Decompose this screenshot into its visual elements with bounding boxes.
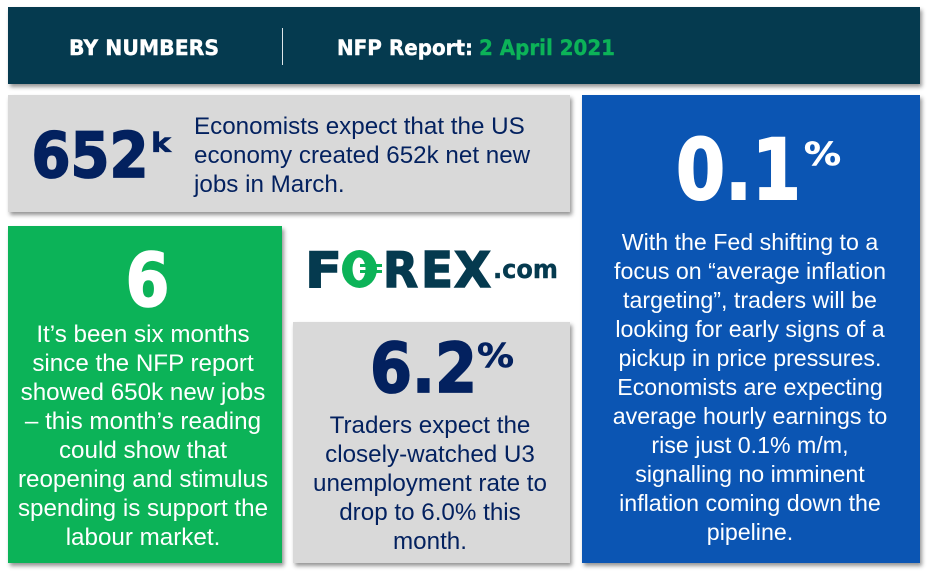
text: traders expect [313, 412, 547, 555]
text: inflation targeting: pickup in price pressures. [619, 345, 881, 371]
text: economists expect [193, 113, 530, 198]
text: inflation targeting: pipeline. [707, 519, 793, 545]
header title: NFP report date [337, 36, 615, 60]
text: six months since: since the NFP report [32, 350, 254, 377]
header bar [8, 7, 920, 84]
logo: FOREX.com: R [383, 242, 418, 299]
text: six months since: reopening and stimulus [18, 466, 268, 493]
icon: green O with currency mark [342, 250, 382, 288]
text: six months since: spending is support the [18, 495, 268, 522]
panel: 652k jobs [8, 95, 570, 212]
stat: 652k: k [151, 128, 172, 159]
text: inflation targeting: targeting”, traders will be [623, 287, 877, 313]
header title: NFP report date: NFP Report: [337, 36, 473, 60]
panel: 6.2% unemployment [293, 322, 570, 563]
text: traders expect: Traders expect the [330, 412, 530, 439]
text: inflation targeting: inflation coming down the [619, 490, 881, 516]
text: inflation targeting: focus on “average inflation [614, 258, 886, 284]
text: inflation targeting: signalling no imminent [635, 461, 865, 487]
stat: 652k: 652 [32, 119, 148, 192]
panel: 6 months [8, 226, 282, 563]
text: traders expect: drop to 6.0% this [339, 499, 521, 526]
header label: by numbers: BY NUMBERS [69, 36, 219, 60]
text: six months since: showed 650k new jobs [21, 379, 265, 406]
logo: FOREX.com: X [454, 242, 491, 299]
text: traders expect: unemployment rate to [313, 470, 547, 497]
text: inflation targeting: With the Fed shifting to a [622, 229, 878, 255]
stat: 6: 6 [126, 238, 170, 324]
logo: FOREX.com: .com [493, 255, 558, 285]
stat: 6.2%: % [477, 336, 514, 375]
text: traders expect: month. [393, 528, 467, 555]
text: economists expect: economy created 652k net new [194, 142, 530, 169]
text: economists expect: jobs in March. [194, 171, 345, 198]
text: inflation targeting: Economists are expecting [617, 374, 883, 400]
stat: 6.2%: 6.2 [370, 329, 477, 409]
text: inflation targeting: rise just 0.1% m/m, [651, 432, 849, 458]
text: six months since: It’s been six months [36, 321, 250, 348]
text: six months since [18, 321, 268, 551]
text: inflation targeting: average hourly earnings to [613, 403, 887, 429]
text: six months since: – this month’s reading [25, 408, 261, 435]
logo: FOREX.com [305, 242, 558, 299]
logo: FOREX.com: F [305, 242, 342, 299]
text: economists expect: Economists expect that the US [194, 113, 525, 140]
text: traders expect: closely-watched U3 [325, 441, 535, 468]
text: inflation targeting: looking for early signs of a [615, 316, 885, 342]
text: six months since: labour market. [66, 524, 220, 551]
header title: NFP report date: 2 April 2021 [479, 36, 615, 60]
stat: 0.1%: % [804, 135, 841, 173]
logo: FOREX.com: E [421, 242, 453, 299]
panel: 0.1% earnings [582, 95, 920, 563]
stat: 0.1%: 0.1 [676, 121, 801, 219]
text: inflation targeting [613, 229, 887, 545]
text: six months since: could show that [59, 437, 227, 464]
